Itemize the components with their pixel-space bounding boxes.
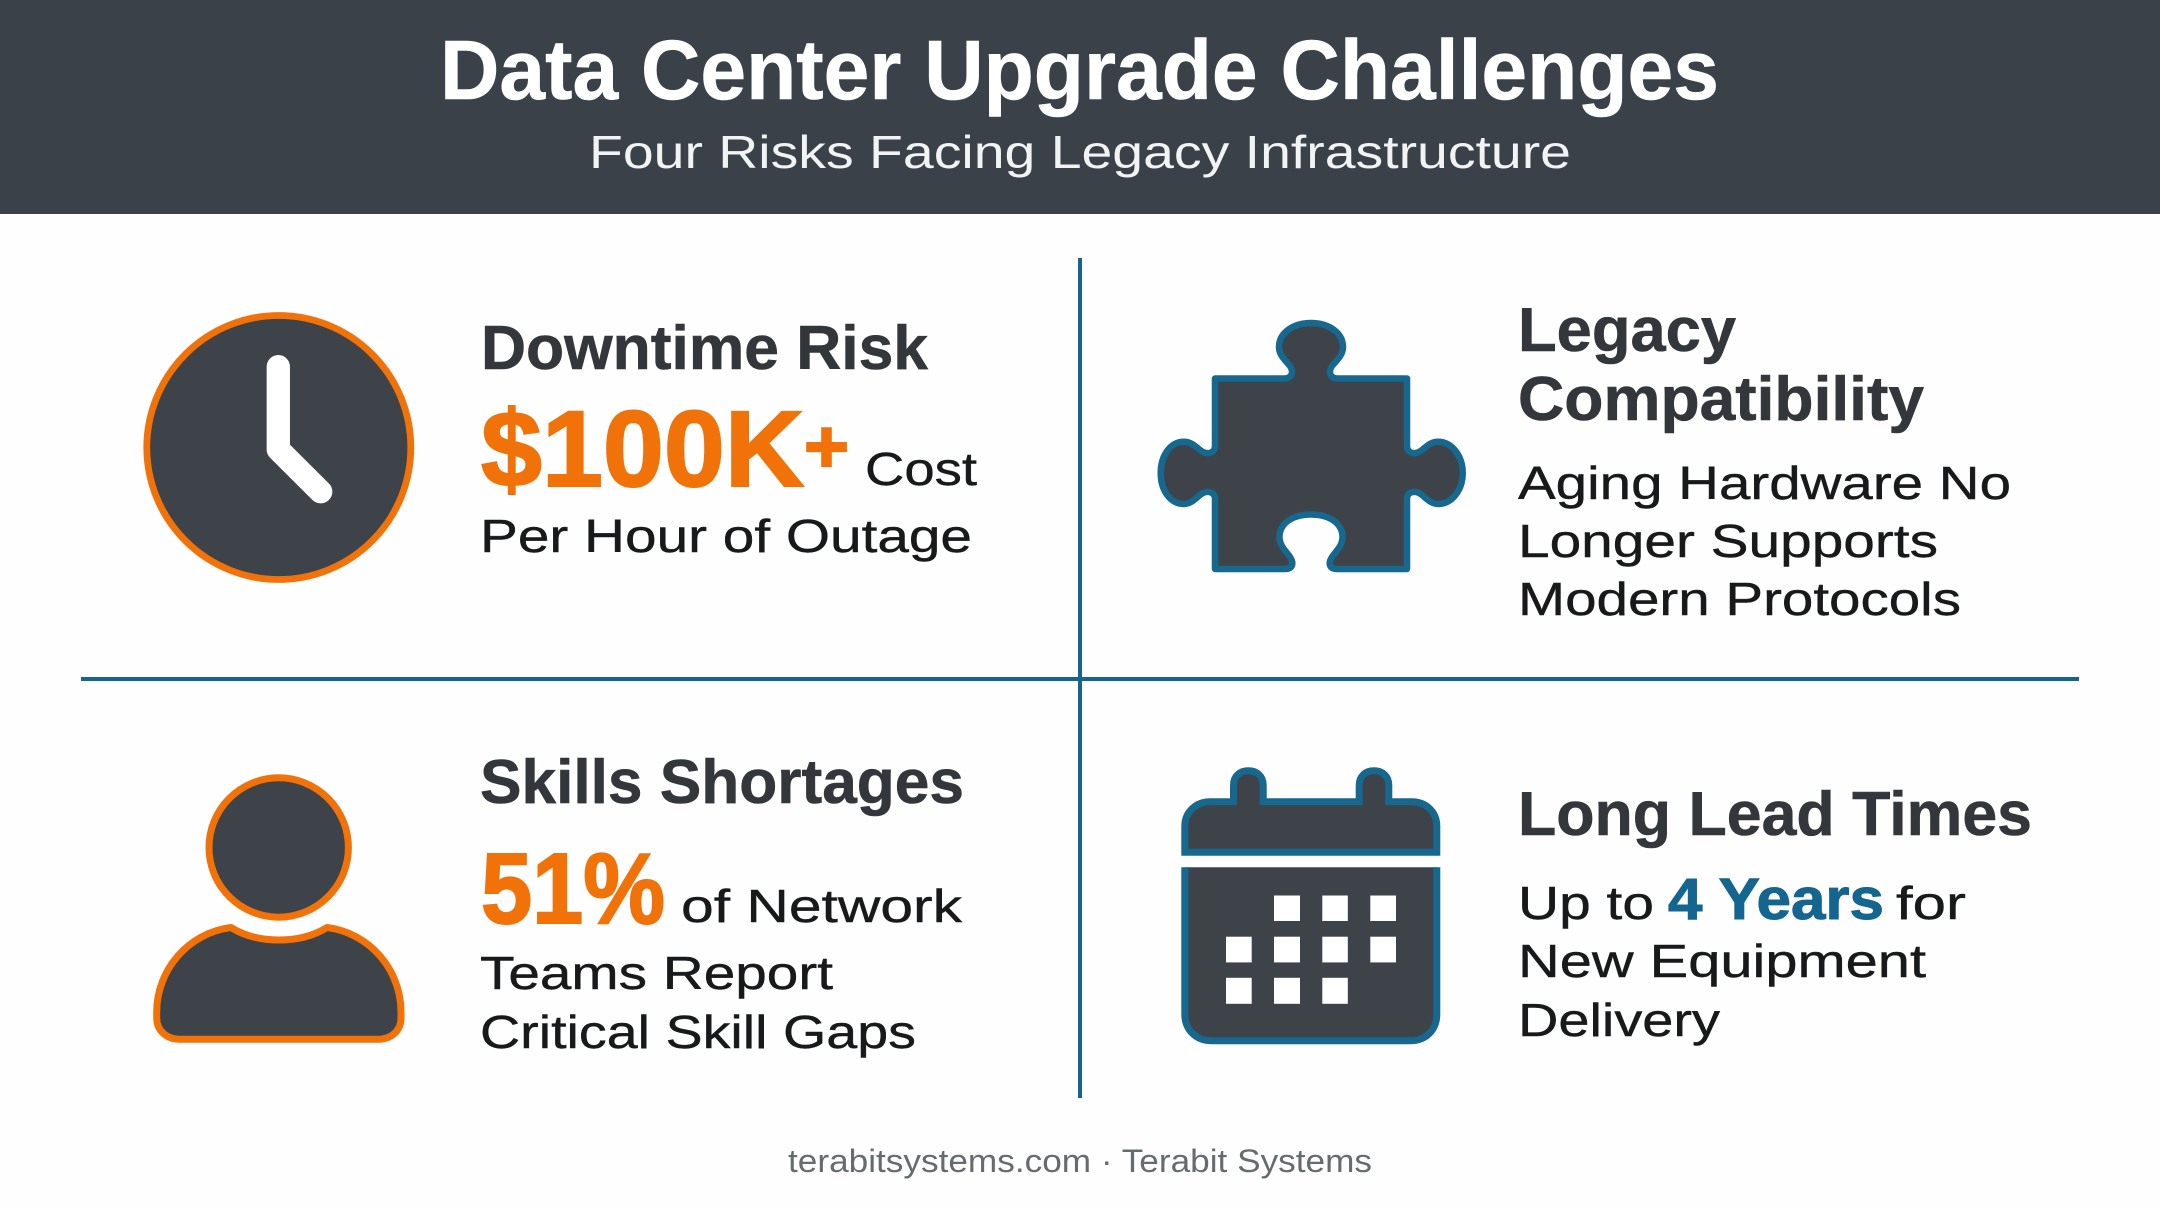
text: up to 4 years bbox=[1518, 867, 1966, 1046]
panel: long lead times bbox=[1185, 771, 2032, 1046]
stat: cost per hour: $100K bbox=[481, 388, 804, 509]
text: aging hardware bbox=[1518, 457, 2011, 625]
heading: legacy compatibility: Compatibility bbox=[1518, 365, 1925, 434]
stat: 51 percent bbox=[481, 833, 963, 945]
icon: puzzle piece bbox=[1161, 323, 1463, 569]
text: aging hardware: Modern Protocols bbox=[1518, 573, 1961, 625]
footer credit: terabitsystems.com · Terabit Systems bbox=[788, 1143, 1372, 1179]
stat: 51 percent: 51% bbox=[481, 833, 665, 945]
text: per hour of outage: Per Hour of Outage bbox=[480, 510, 972, 562]
heading: skills shortages: Skills Shortages bbox=[480, 748, 964, 817]
text: teams report: Teams Report bbox=[480, 947, 833, 999]
text: up to 4 years: Up to bbox=[1518, 877, 1654, 929]
panel: skills shortages bbox=[157, 748, 964, 1058]
heading: legacy compatibility: Legacy bbox=[1518, 296, 1737, 365]
stat: cost per hour: Cost bbox=[865, 443, 977, 495]
panel: legacy compatibility bbox=[1161, 296, 2011, 625]
text: teams report bbox=[480, 947, 916, 1058]
text: up to 4 years: Delivery bbox=[1518, 994, 1720, 1046]
icon: calendar bbox=[1185, 771, 1437, 1041]
text: up to 4 years: 4 Years bbox=[1668, 867, 1884, 932]
stat: 51 percent: of Network bbox=[681, 880, 963, 932]
text: aging hardware: Longer Supports bbox=[1518, 515, 1938, 567]
heading: downtime risk: Downtime Risk bbox=[481, 314, 929, 383]
title: Data Center Upgrade Challenges bbox=[440, 23, 1719, 117]
subtitle: Four Risks Facing Legacy Infrastructure bbox=[589, 126, 1571, 178]
heading: long lead times: Long Lead Times bbox=[1518, 780, 2032, 849]
icon: person bbox=[157, 778, 401, 1039]
panel: downtime risk bbox=[147, 314, 977, 580]
text: teams report: Critical Skill Gaps bbox=[480, 1006, 916, 1058]
heading: legacy compatibility bbox=[1518, 296, 1925, 434]
text: aging hardware: Aging Hardware No bbox=[1518, 457, 2011, 509]
icon: clock bbox=[147, 316, 411, 580]
text: up to 4 years: for bbox=[1896, 877, 1966, 929]
header banner bbox=[0, 0, 2160, 214]
text: up to 4 years: New Equipment bbox=[1518, 935, 1926, 987]
stat: cost per hour bbox=[481, 388, 977, 509]
stat: cost per hour: + bbox=[804, 405, 849, 488]
